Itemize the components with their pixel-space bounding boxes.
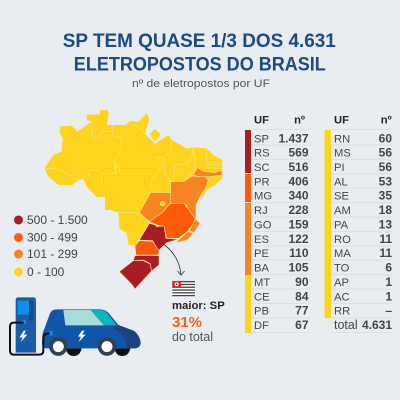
- table: left column: 67: [295, 318, 309, 332]
- table: left column: 105: [288, 260, 309, 274]
- title: ELETROPOSTOS DO BRASIL: [74, 54, 326, 76]
- callout: maior SP: 31%: [172, 314, 202, 331]
- GO: [139, 193, 171, 222]
- table: right column: 1: [385, 289, 392, 303]
- RJ: [176, 232, 193, 243]
- table: right column: RO: [334, 234, 351, 246]
- table: right column: AP: [334, 277, 349, 289]
- table: right column: 56: [379, 160, 392, 174]
- legend: [14, 213, 88, 279]
- icon: electric car and charger: [10, 297, 141, 356]
- callout: maior SP: do total: [172, 330, 213, 344]
- table: left column: 159: [288, 217, 309, 231]
- table: right column: [324, 114, 393, 332]
- table: left column: 516: [288, 160, 309, 174]
- table: left column: RJ: [254, 205, 268, 217]
- table: right column: 11: [379, 232, 392, 246]
- PE: [193, 168, 222, 177]
- table header: [334, 114, 392, 126]
- table: left column: 122: [288, 232, 309, 246]
- table: left column: DF: [254, 320, 269, 332]
- table header: UF: [254, 114, 269, 126]
- icon: São Paulo flag: [172, 281, 195, 297]
- MS: [118, 213, 149, 245]
- Marajó island: [149, 129, 161, 142]
- cable: [10, 323, 50, 355]
- legend: 101 - 299: [27, 247, 78, 261]
- table: right column: –: [385, 304, 392, 318]
- MG: [149, 203, 195, 238]
- table: left column: PE: [254, 248, 269, 260]
- table: right column: 13: [379, 217, 392, 231]
- table: right column: MA: [334, 248, 351, 260]
- RS: [119, 261, 152, 289]
- table: left column: SC: [254, 162, 270, 174]
- subtitle: nº de eletropostos por UF: [132, 78, 270, 90]
- table: right column: 6: [385, 260, 392, 274]
- table: right column: 53: [379, 174, 392, 188]
- PR: [135, 241, 159, 255]
- table: right column: TO: [334, 262, 350, 274]
- table: right column: AM: [334, 205, 351, 217]
- table: right column: 35: [379, 189, 392, 203]
- table: left column: 228: [288, 203, 309, 217]
- table: right column: AL: [334, 176, 348, 188]
- rows: [251, 130, 311, 332]
- title: [63, 30, 336, 76]
- MT south: [105, 187, 152, 213]
- table: left column: CE: [254, 291, 270, 303]
- callout: maior SP: [172, 300, 225, 344]
- table: left column: GO: [254, 219, 272, 231]
- BA: [170, 176, 208, 222]
- table: left column: PR: [254, 176, 270, 188]
- table: right column: PA: [334, 219, 349, 231]
- table: left column: 84: [295, 289, 309, 303]
- table: right column: 60: [379, 131, 392, 145]
- rows: [331, 130, 393, 332]
- ES: [189, 219, 200, 233]
- table: right column: RN: [334, 133, 350, 145]
- table: right column: 1: [385, 275, 392, 289]
- table: left column: 406: [288, 174, 309, 188]
- table: left column: 77: [295, 304, 309, 318]
- table: left column: 1.437: [278, 131, 309, 145]
- table: right column: PI: [334, 162, 345, 174]
- table: left column: 340: [288, 189, 309, 203]
- color bar: [324, 130, 331, 318]
- central and south states: [105, 187, 200, 289]
- northeast states: [140, 129, 222, 222]
- table: left column: RS: [254, 148, 270, 160]
- table header: nº: [294, 114, 305, 126]
- wheels: [66, 348, 82, 356]
- map of Brazil: [44, 110, 222, 289]
- table: left column: MG: [254, 191, 272, 203]
- table: right column: 18: [379, 203, 392, 217]
- SP: [139, 223, 178, 251]
- color bars: [245, 130, 251, 173]
- table header: UF: [334, 114, 349, 126]
- car body: [42, 309, 141, 348]
- table: left column: MT: [254, 277, 270, 289]
- arrow: [162, 243, 184, 275]
- legend: 0 - 100: [27, 265, 65, 279]
- table: left column: PB: [254, 306, 269, 318]
- table: left column: 110: [289, 246, 309, 260]
- table header: [254, 114, 305, 126]
- windows: [63, 310, 104, 325]
- table: left column: 90: [295, 275, 309, 289]
- table: left column: SP: [254, 133, 269, 145]
- table: right column: total: [334, 318, 358, 332]
- table: right column: MS: [334, 148, 351, 160]
- table: left column: [245, 114, 311, 333]
- legend: 500 - 1.500: [27, 213, 88, 227]
- legend: 300 - 499: [27, 230, 78, 244]
- table: right column: 11: [379, 246, 392, 260]
- table header: nº: [381, 114, 392, 126]
- callout: maior SP: maior: SP: [172, 300, 225, 312]
- table: right column: SE: [334, 191, 349, 203]
- charger: [16, 297, 36, 353]
- table: left column: 569: [288, 146, 309, 160]
- table: right column: 56: [379, 146, 392, 160]
- table: left column: BA: [254, 262, 269, 274]
- title: SP TEM QUASE 1/3 DOS 4.631: [63, 30, 336, 52]
- DF: [160, 201, 165, 206]
- northwest states: [44, 110, 155, 210]
- table: right column: AC: [334, 291, 350, 303]
- table: right column: RR: [334, 306, 350, 318]
- table: left column: ES: [254, 234, 269, 246]
- table: right column: 4.631: [362, 318, 392, 332]
- SC: [133, 256, 159, 271]
